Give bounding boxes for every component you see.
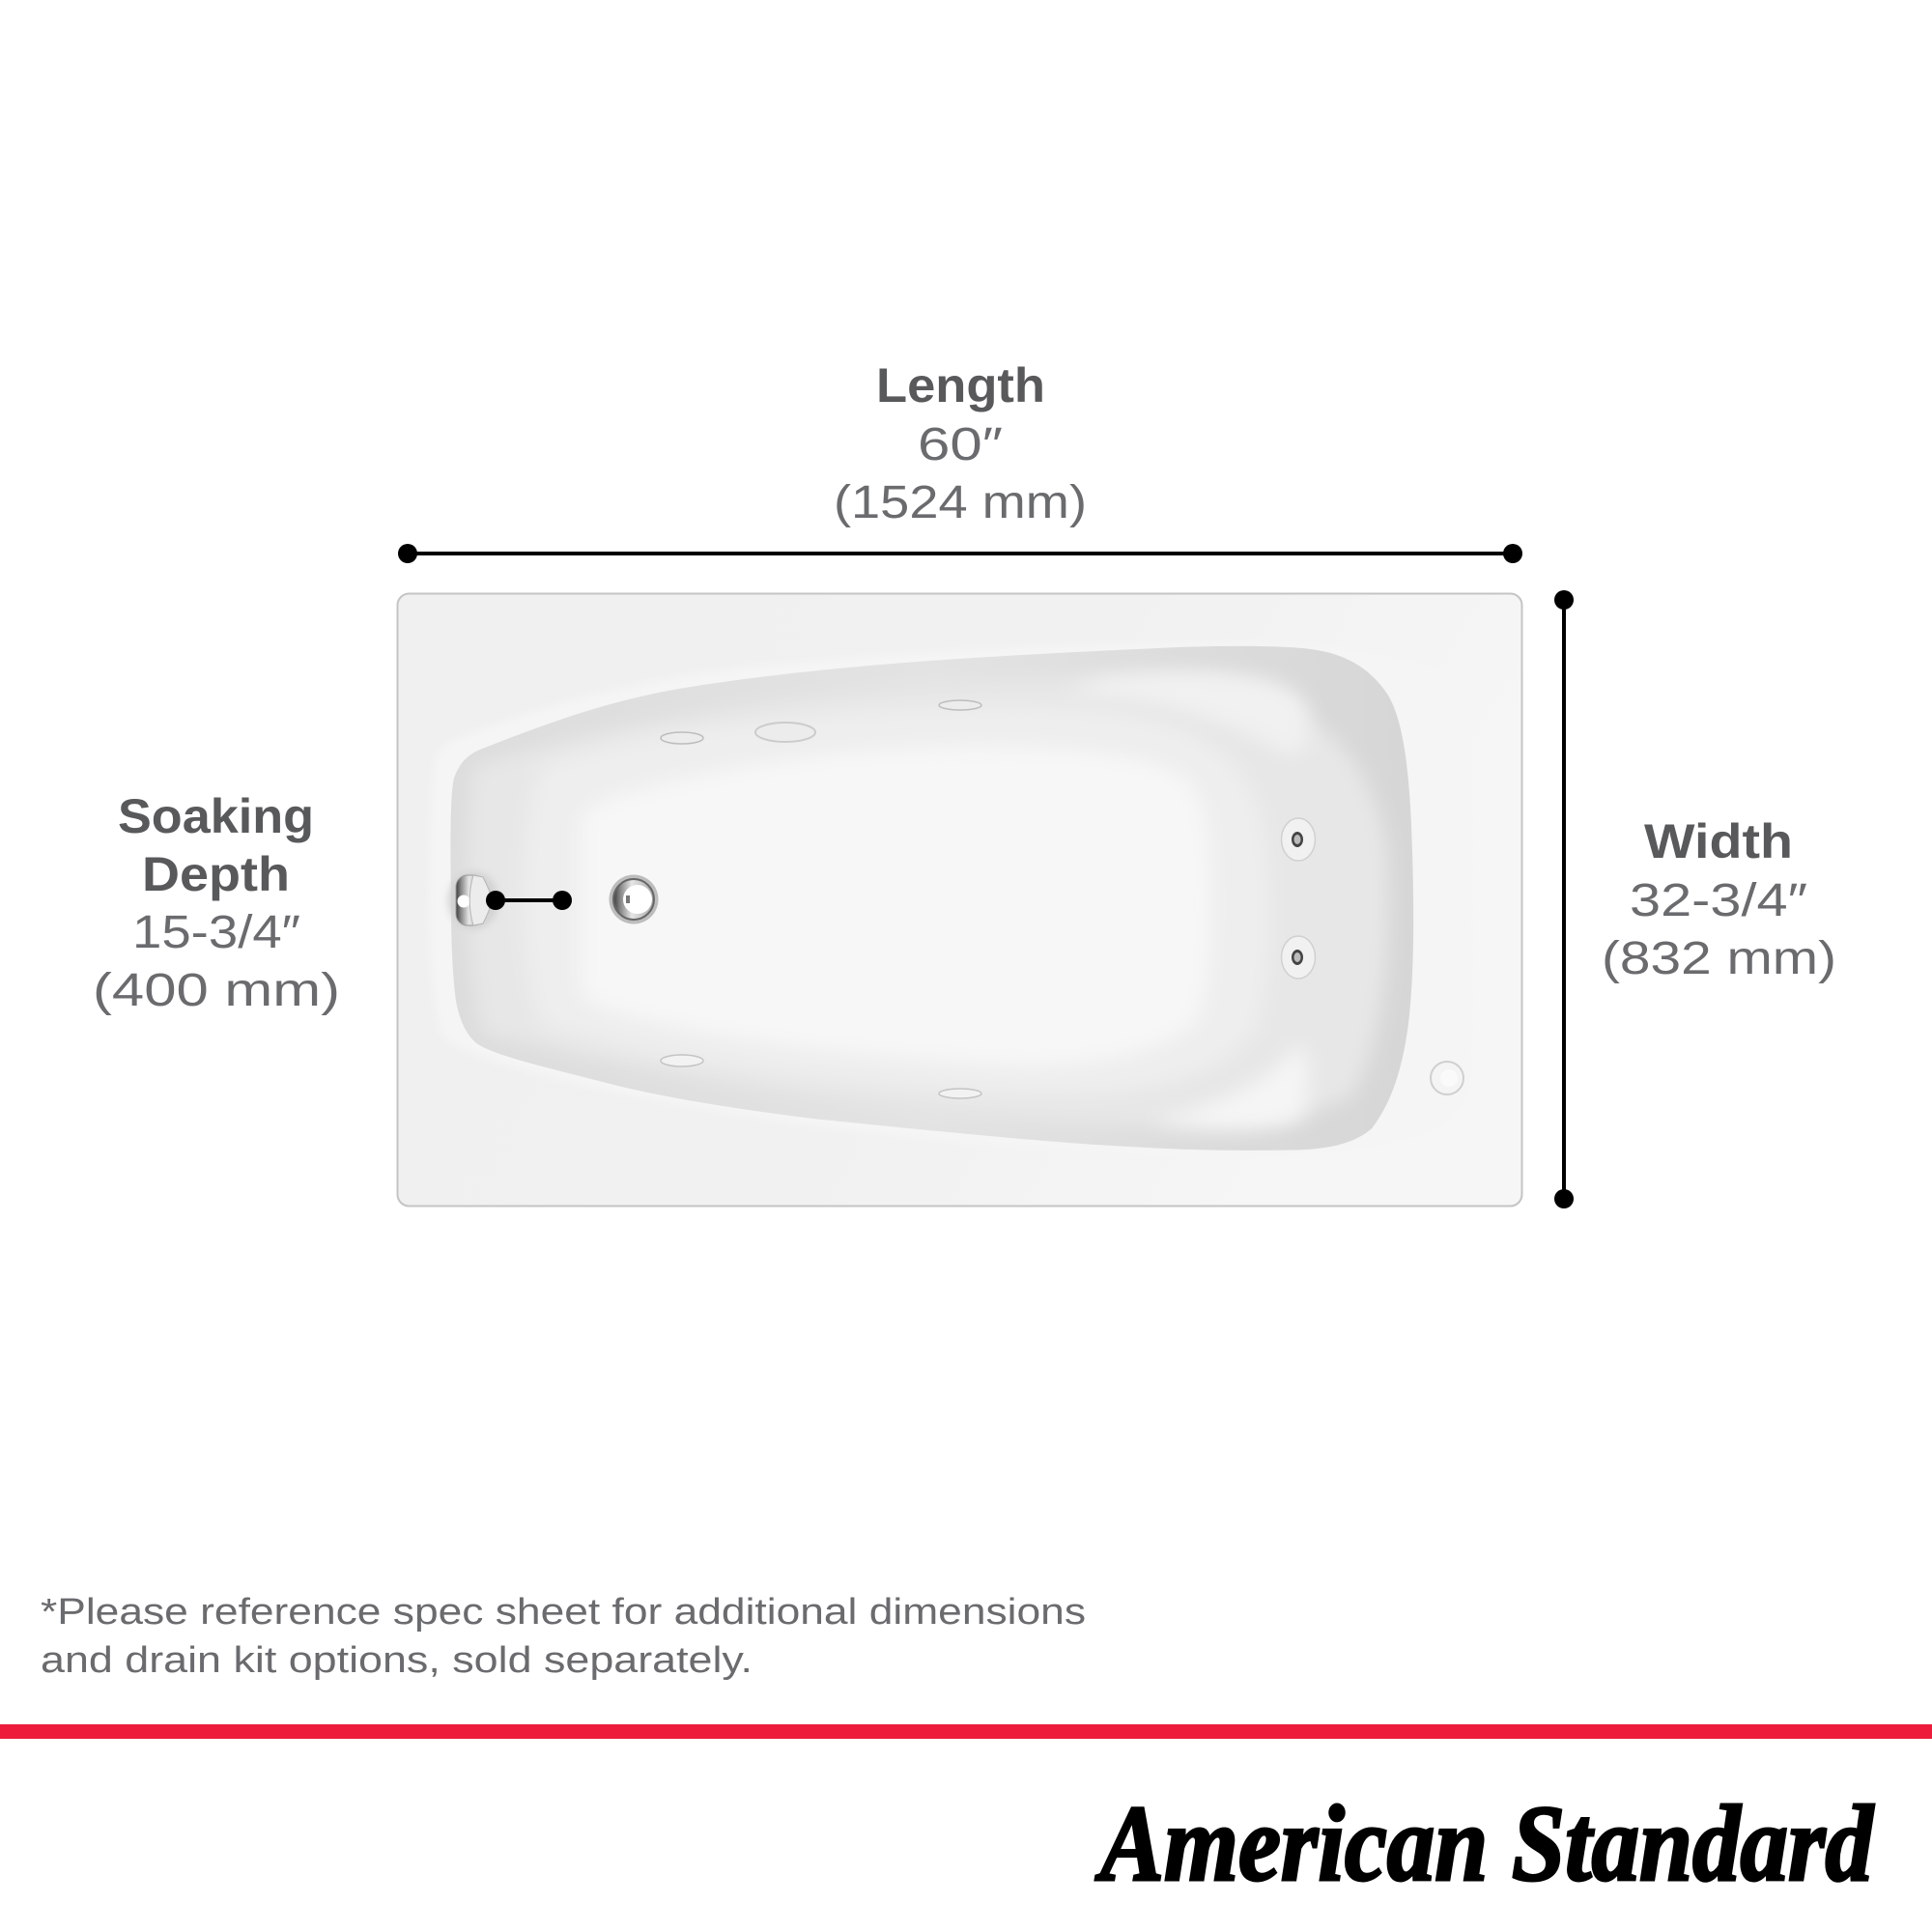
length label: (1524 mm) [834, 477, 1087, 528]
soaking depth label: Soaking [118, 789, 314, 843]
bathtub top view [398, 593, 1522, 1206]
length label [834, 358, 1087, 528]
side jet upper [1281, 818, 1316, 861]
width dimension line [1554, 590, 1574, 1208]
length dimension line [398, 544, 1522, 563]
soaking depth label: Depth [142, 847, 290, 901]
width label: Width [1644, 814, 1793, 868]
drain [609, 875, 659, 923]
air button [1431, 1062, 1463, 1094]
bowl rim [430, 642, 1474, 1156]
upper shelf highlight [1107, 669, 1308, 742]
soaking depth label: 15-3/4″ [132, 907, 300, 958]
bowl interior shading [467, 671, 1388, 1129]
bowl walls [450, 646, 1413, 1151]
width label: 32-3/4″ [1630, 875, 1807, 926]
soaking depth label [93, 789, 340, 1016]
tub deck [398, 593, 1522, 1206]
transition band [523, 706, 1270, 1095]
red divider [0, 1724, 1932, 1739]
length label: 60″ [918, 419, 1003, 470]
bottom jets [661, 1055, 981, 1098]
overflow plate [448, 871, 498, 929]
width label: (832 mm) [1602, 933, 1836, 984]
width label [1602, 814, 1836, 984]
length label: Length [876, 358, 1045, 412]
footnote: *Please reference spec sheet for additional dimensions [41, 1592, 1086, 1633]
lower shelf highlight [1181, 1057, 1306, 1132]
footnote [41, 1592, 1086, 1681]
soaking depth label: (400 mm) [93, 965, 340, 1016]
side jet lower [1281, 936, 1316, 979]
soaking depth dimension line [486, 891, 572, 910]
soft wall glow [473, 717, 1389, 1119]
top jets [661, 700, 981, 744]
tub floor [594, 759, 1198, 1053]
footnote: and drain kit options, sold separately. [41, 1640, 753, 1681]
